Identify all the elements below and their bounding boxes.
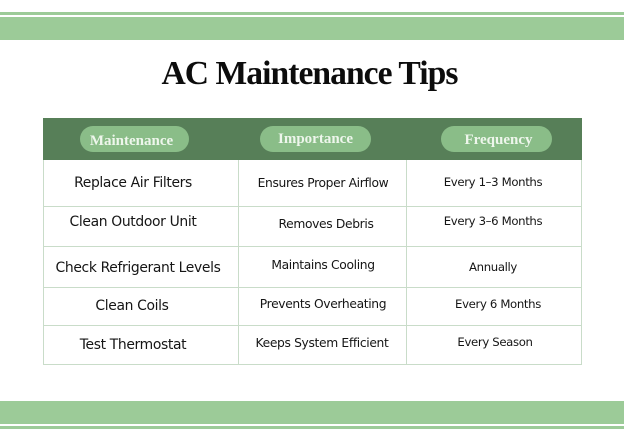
row 4: Clean Coils: Every 6 Months xyxy=(455,297,541,311)
row 5: Test Thermostat: Keeps System Efficient xyxy=(256,336,388,350)
bottom decorative band xyxy=(0,401,624,429)
row 5: Test Thermostat: Test Thermostat xyxy=(80,337,186,353)
row 1: Replace Air Filters: Replace Air Filters xyxy=(74,175,192,191)
header: Frequency: Frequency xyxy=(464,132,533,148)
header: Maintenance xyxy=(80,126,189,152)
row 3: Check Refrigerant Levels: Maintains Cooling xyxy=(271,258,375,272)
row 3: Check Refrigerant Levels: Annually xyxy=(469,260,517,274)
table header bar xyxy=(43,118,582,160)
header: Maintenance: Maintenance xyxy=(90,133,173,149)
table grid xyxy=(43,118,582,365)
row 1: Replace Air Filters xyxy=(74,175,542,191)
row 4: Clean Coils xyxy=(95,297,541,314)
row 4: Clean Coils: Clean Coils xyxy=(95,298,169,314)
row 3: Check Refrigerant Levels xyxy=(56,258,517,276)
row 1: Replace Air Filters: Every 1–3 Months xyxy=(444,175,542,189)
row 5: Test Thermostat xyxy=(80,335,533,353)
header: Importance: Importance xyxy=(278,131,353,147)
header: Frequency xyxy=(441,126,552,152)
top decorative band xyxy=(0,12,624,40)
row 1: Replace Air Filters: Ensures Proper Airflow xyxy=(258,176,388,190)
row 2: Clean Outdoor Unit xyxy=(70,214,542,231)
row 3: Check Refrigerant Levels: Check Refrigerant Levels xyxy=(56,260,220,276)
row 5: Test Thermostat: Every Season xyxy=(457,335,533,349)
row 4: Clean Coils: Prevents Overheating xyxy=(260,297,386,311)
row 2: Clean Outdoor Unit: Removes Debris xyxy=(278,217,374,231)
table xyxy=(43,118,582,365)
header: Importance xyxy=(260,126,371,152)
title: AC Maintenance Tips xyxy=(161,55,458,92)
row 2: Clean Outdoor Unit: Clean Outdoor Unit xyxy=(70,214,196,230)
row 2: Clean Outdoor Unit: Every 3–6 Months xyxy=(444,214,542,228)
